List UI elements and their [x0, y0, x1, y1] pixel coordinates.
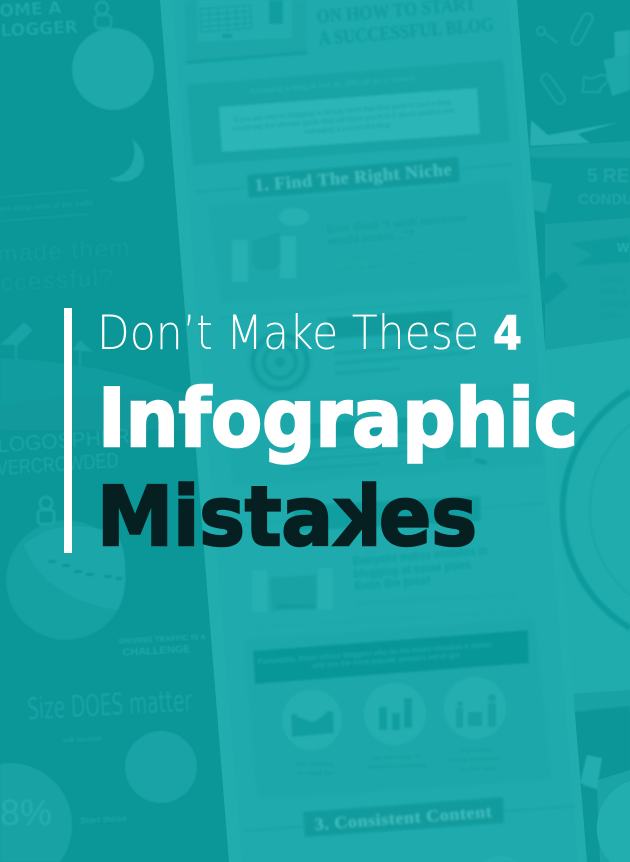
text: ever think: would invent..."?: [326, 229, 415, 248]
headline: [97, 306, 578, 565]
icon: lightbulb: [232, 208, 309, 282]
icon: right tag: [580, 755, 602, 788]
right panel ribbon: [570, 236, 630, 266]
left heading: blogosphere overcrowded: LOGOSPHERE: [0, 424, 145, 457]
central blog infographic strip: [160, 0, 630, 862]
labels under icons: Not building: [296, 761, 334, 768]
inner faint ring: [590, 425, 630, 595]
icon: bars circle: [364, 683, 426, 745]
text: everyone makes mistakes: blogging at some point.: [353, 557, 474, 581]
planet circle: [72, 28, 154, 110]
intro panel: [187, 60, 510, 165]
labels under icons: doing everything: [449, 755, 501, 764]
hill: [0, 358, 190, 430]
caption: driving traffic: [119, 632, 207, 659]
heading: size does matter: Size DOES matter: [26, 684, 193, 727]
caption: driving traffic: CHALLENGE: [122, 643, 191, 659]
right panel text: deck o: [600, 286, 627, 296]
text: niche body: That's called a niche, and it's how many successful: [329, 245, 476, 264]
left heading: blogosphere overcrowded: VERCROWDED: [0, 449, 119, 480]
section 2 mistakes card: [252, 543, 516, 612]
section banner 1: 1. Find The Right Niche: [254, 159, 453, 195]
headline line three with flipped k: [97, 470, 477, 565]
section banner 2: [327, 310, 453, 339]
headline line one: 4: [493, 306, 522, 360]
section 1 card: [207, 180, 522, 304]
left heading: blogosphere overcrowded: [0, 424, 146, 480]
text: everyone makes mistakes: Even the pros!: [354, 573, 431, 593]
right small paper: [530, 180, 552, 213]
icon: telescope trees: [0, 322, 93, 368]
icon: keyboard grid: [200, 5, 252, 32]
section banner 3: 3. Consistent Content: [314, 802, 493, 834]
text: niche body: [329, 245, 476, 274]
divider line four: [245, 610, 540, 628]
icon: target: [247, 329, 313, 395]
right panel header: 5 RE: [587, 166, 629, 187]
left question text: [0, 234, 133, 297]
right panel text: [600, 240, 630, 320]
intro panel: If you are new to blogging or simply need that final push to start a blog,: [234, 99, 453, 124]
right paper stack: [614, 30, 630, 88]
left caption band: ers bring most of the traffic: [0, 198, 95, 214]
bottom circle hint: [482, 856, 518, 862]
text: niche body: bloggers get started. The same is true of blogs: [330, 256, 464, 274]
title: how to start a blog: [316, 0, 495, 50]
caption: dotted text: Start those: [80, 813, 127, 826]
text: mistakes body: Avoid the most common of the pros seen from your mistakes: [356, 593, 516, 607]
icon: paper plane: [530, 120, 620, 146]
headline line one: Don’t Make These: [97, 306, 479, 361]
text: everyone makes mistakes: [352, 543, 488, 593]
right panel text: produ: [600, 310, 623, 320]
caption: receive: will receive: [62, 734, 103, 745]
left question text: ccessful?: [0, 264, 115, 297]
icon: paper clips: [537, 12, 608, 106]
big ring: [563, 392, 630, 628]
strip background: [160, 0, 587, 862]
icon: small figure above planet: [95, 2, 111, 28]
left question text: made them: [0, 234, 131, 268]
headline line two: Infographic: [98, 372, 578, 465]
text: everyone makes mistakes: Everyone makes mistakes in: [352, 543, 488, 568]
stat circle: percent: 8%: [0, 792, 52, 833]
circle: [125, 731, 197, 803]
icon: usb stick: [538, 271, 569, 305]
background: right desk items: [530, 12, 630, 146]
intro panel: managing a successful blog: [304, 122, 390, 136]
survey banner text: and see the most popular answers we've got: [311, 650, 461, 670]
right panel strip: [525, 141, 630, 158]
right panel text: overvie: [600, 298, 629, 308]
title: how to start a blog: A SUCCESSFUL BLOG: [318, 15, 495, 50]
icon: envelope circle: [282, 690, 342, 750]
icon: crescent moon: [109, 139, 144, 182]
headline line three with flipped k: es: [379, 470, 477, 565]
section 2 survey panel: [243, 618, 552, 800]
divider line one: [196, 164, 512, 192]
right panel body: [545, 218, 630, 360]
accent bar: [64, 308, 72, 553]
headline line three with flipped k: Mista: [97, 470, 333, 565]
section text lines: [335, 341, 475, 375]
divider line two: [220, 296, 530, 318]
text: ever think: [326, 212, 468, 248]
monitor panel: [184, 0, 308, 64]
survey dark banner: [253, 630, 529, 684]
left heading fragment: [0, 0, 78, 42]
labels under icons: Not focusing on: [372, 753, 422, 762]
survey banner text: Fortunately, these advice bloggers who do the hours mistakes it shows: [257, 640, 492, 666]
planet with figures: [6, 497, 126, 640]
intro panel: Knowing a blog is not as difficult as it seems: [249, 72, 416, 96]
right panel text: A com: [600, 274, 625, 284]
text: ever think: Ever think "I wish someone: [326, 212, 468, 236]
icon: monitor stand: [222, 34, 232, 38]
section banner 3: [303, 797, 504, 837]
labels under icons: Perfection: [460, 747, 492, 755]
headline line three with flipped k: k: [333, 470, 381, 565]
background: right lower panel: [570, 690, 630, 712]
intro panel: would say the ultimate guide that will show you A to Z about starting and: [231, 108, 454, 133]
labels under icons: an email list: [296, 770, 334, 777]
icon: people circle: [444, 677, 506, 739]
labels under icons: on your own: [458, 765, 497, 773]
left caption band: [0, 189, 95, 222]
icon: mistake illustration: [252, 568, 333, 612]
caption: driving traffic: DRIVING TRAFFIC IS A: [119, 632, 207, 646]
section banner 2b: [293, 496, 481, 531]
right lower circle: [597, 781, 630, 862]
stat circle: percent: [0, 763, 72, 862]
divider line five: [245, 806, 575, 831]
section block 2 card: [225, 382, 545, 488]
left blurred infographic: [0, 0, 207, 862]
right panel text: W: [617, 240, 630, 255]
left heading fragment: LOGGER: [0, 18, 78, 42]
labels under icons: inbound marketing: [368, 762, 427, 771]
right lower light region: [545, 338, 630, 710]
strip inner tone: [172, 0, 578, 862]
labels under icons: [296, 747, 501, 777]
intro text box: [219, 88, 480, 152]
divider line three: [236, 503, 545, 525]
right panel header: [526, 158, 630, 224]
